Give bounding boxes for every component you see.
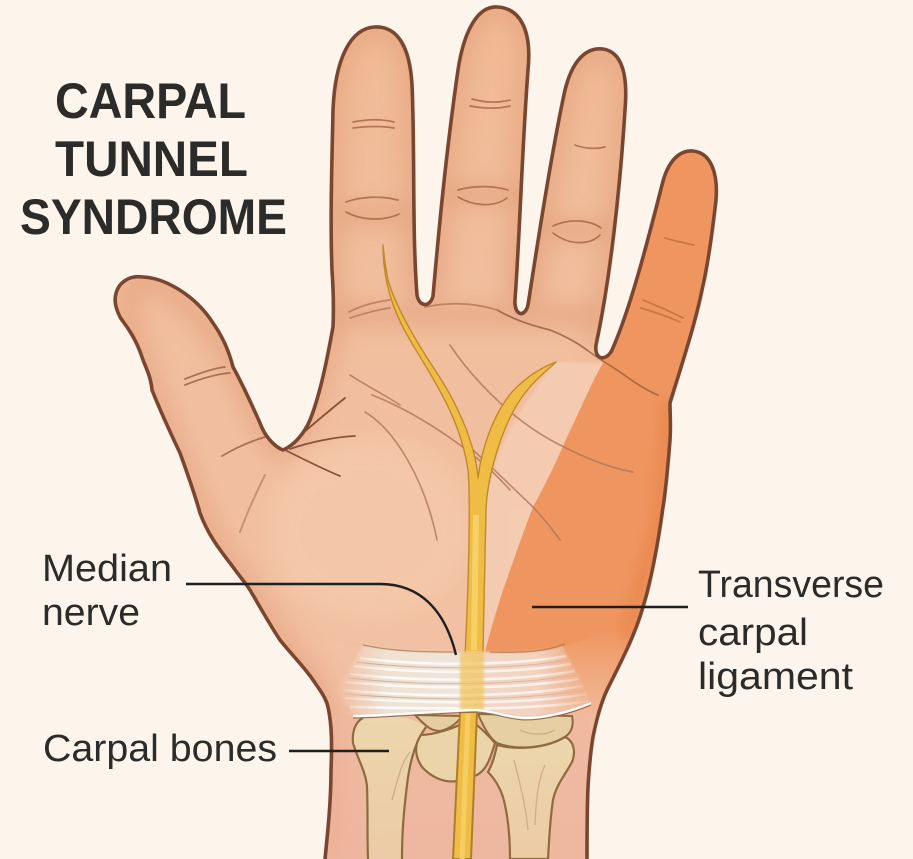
label: carpal bones: Carpal bones xyxy=(43,728,277,770)
nerve seen through ligament xyxy=(460,652,484,711)
skin shading xyxy=(117,9,624,715)
carpal bones xyxy=(353,714,574,859)
bone shading xyxy=(392,730,555,830)
label: transverse carpal ligament: ligament xyxy=(698,656,853,698)
ligament top edge xyxy=(363,644,565,652)
orange numb zone: palm and little finger xyxy=(485,140,730,653)
bone: left forearm bone xyxy=(353,716,426,859)
hand outline xyxy=(115,7,716,859)
nerve highlight xyxy=(474,515,476,650)
ligament lower edge xyxy=(353,703,591,718)
palm creases xyxy=(349,300,658,540)
title: CARPAL xyxy=(55,73,246,129)
wrist shading xyxy=(328,773,334,843)
bone: central carpal xyxy=(416,720,495,781)
bone: left forearm outline xyxy=(353,718,426,859)
label: transverse carpal ligament: carpal xyxy=(698,612,808,654)
palm highlight xyxy=(292,455,446,558)
label: transverse carpal ligament xyxy=(532,564,884,698)
bone: upper right carpal xyxy=(478,714,573,747)
title: SYNDROME xyxy=(20,189,287,245)
orange outer edge shading xyxy=(625,400,668,640)
label: median nerve: nerve xyxy=(42,592,140,634)
median nerve xyxy=(383,245,556,859)
nerve lower highlight xyxy=(462,714,468,859)
bone: upper left carpal xyxy=(415,715,462,731)
label: transverse carpal ligament: Transverse xyxy=(698,564,884,606)
pale wedge beside the orange zone xyxy=(478,362,603,652)
bone: right forearm bone xyxy=(488,737,574,859)
label: median nerve: Median xyxy=(42,548,172,590)
transverse carpal ligament xyxy=(337,644,591,720)
ligament fibres xyxy=(343,656,589,709)
nerve trunk lower xyxy=(453,712,477,859)
hand fill xyxy=(115,7,716,859)
thumb creases xyxy=(185,367,355,532)
title xyxy=(20,73,287,245)
finger creases xyxy=(346,99,694,322)
hand illustration xyxy=(115,7,730,859)
nerve branches and upper trunk xyxy=(383,245,556,654)
title: TUNNEL xyxy=(55,131,248,187)
label: median nerve xyxy=(42,548,456,655)
orange numb zone: wrist fade xyxy=(485,622,636,714)
